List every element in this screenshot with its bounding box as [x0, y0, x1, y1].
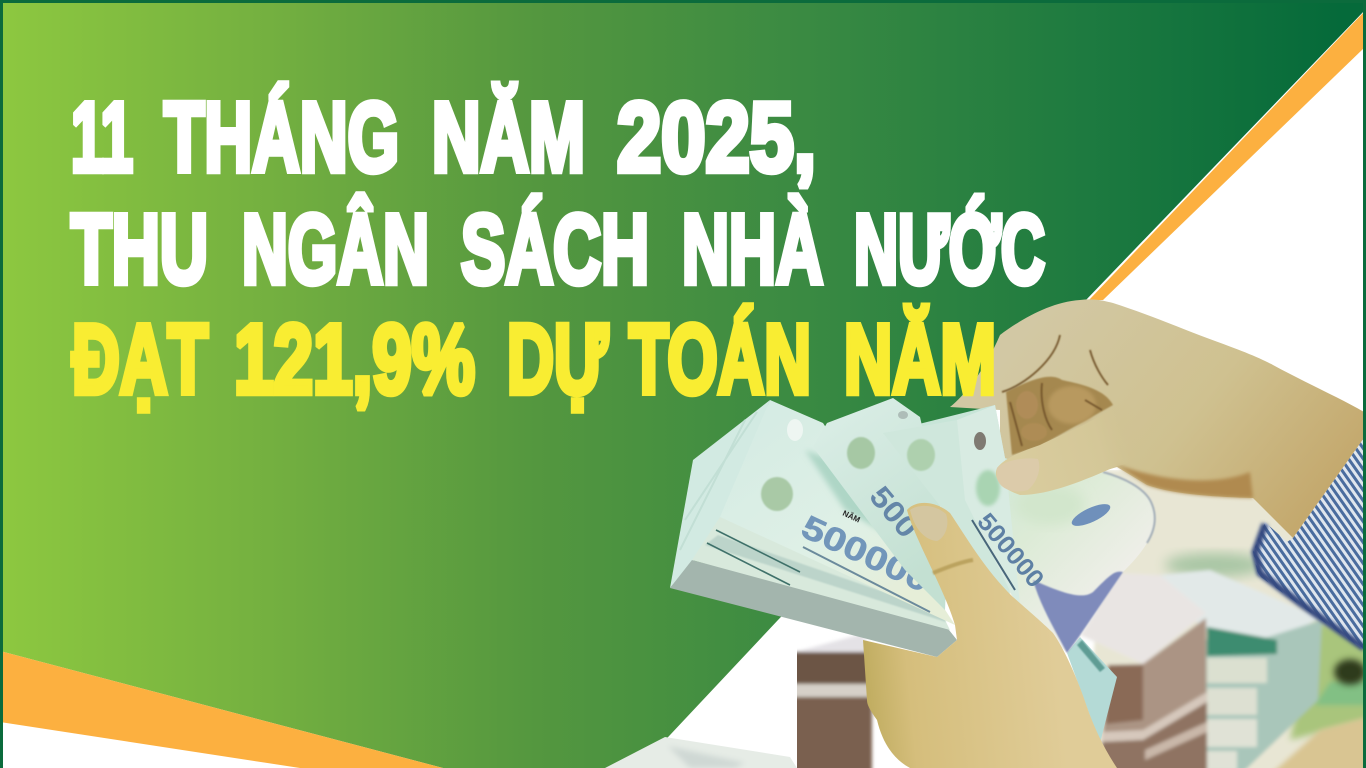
right curved banknote	[883, 405, 1155, 743]
title line 2	[71, 194, 1045, 304]
title line 1	[71, 82, 816, 192]
shirt sleeve	[1253, 438, 1364, 650]
banknote denomination: 500000	[971, 508, 1049, 593]
left banknote stack	[670, 400, 957, 657]
title line 1: NĂM	[432, 82, 585, 192]
title line 3 highlight: NĂM	[844, 304, 996, 414]
palm shade	[1115, 464, 1253, 498]
title line 2: THU	[71, 194, 208, 304]
third fanned banknote	[883, 405, 1049, 605]
title line 2: NGÂN	[242, 194, 429, 304]
money stack: green	[1160, 570, 1322, 768]
title line 1: THÁNG	[164, 82, 399, 192]
banknote denomination: 500	[863, 480, 924, 544]
banknote dragon pattern	[1033, 572, 1123, 653]
upper hand back and fingers	[950, 299, 1364, 538]
money stack: brown right	[1080, 573, 1207, 768]
title line 3 highlight	[72, 304, 996, 414]
title line 3 highlight: TOÁN	[629, 304, 811, 414]
title line 1: 11	[71, 82, 133, 192]
thumbnail	[910, 506, 947, 541]
banknote words: NĂM	[841, 509, 862, 525]
title line 3 highlight: 121,9%	[234, 304, 475, 414]
blurred background with money stacks	[790, 470, 1366, 768]
photo: money and hands	[605, 299, 1366, 768]
orange diagonal stripe top right	[1089, 12, 1364, 300]
middle banknote	[813, 398, 948, 610]
title line 3 highlight: ĐẠT	[72, 304, 208, 414]
curled fingers in shadow	[1006, 377, 1113, 455]
title line 1: 2025,	[617, 82, 816, 192]
title	[71, 82, 1045, 414]
title line 2: NƯỚC	[854, 194, 1045, 304]
bottom banknote	[605, 737, 797, 768]
upper hand thumb	[996, 400, 1141, 495]
banknote seal	[1069, 500, 1113, 530]
orange stripe bottom left	[0, 651, 443, 768]
money stack: brown left	[790, 634, 872, 768]
banknote denomination: 500000	[796, 508, 936, 599]
title line 2: NHÀ	[682, 194, 823, 304]
lower hand with thumb	[863, 503, 1117, 768]
background table and greenery	[1090, 470, 1366, 768]
title line 2: SÁCH	[461, 194, 649, 304]
title line 3 highlight: DỰ	[507, 304, 608, 414]
